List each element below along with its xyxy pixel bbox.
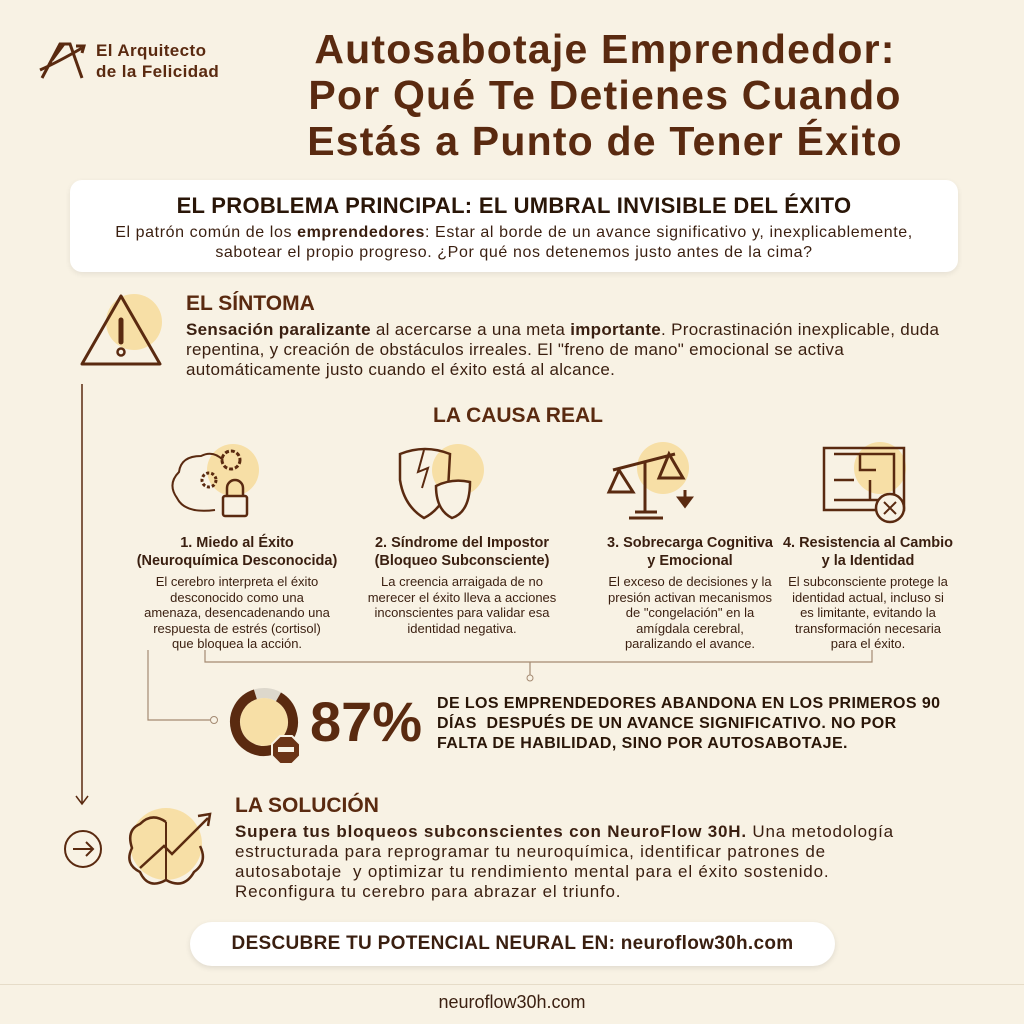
CTA pill — [190, 922, 835, 966]
title — [307, 26, 903, 164]
icon: shield mask — [398, 444, 484, 520]
text: problema: sabotear el propio progreso. ¿Por qué nos detenemos justo antes de la cima? — [215, 244, 813, 261]
icon: blueprint x — [822, 442, 906, 524]
footer url: neuroflow30h.com — [438, 992, 586, 1012]
logo: de la Felicidad — [96, 62, 219, 81]
CTA pill: DESCUBRE TU POTENCIAL NEURAL EN: neuroflow30h.com — [232, 933, 793, 954]
cause 2: (Bloqueo Subconsciente) — [375, 553, 549, 569]
cause 2 — [368, 535, 556, 636]
cause 3: paralizando el avance. — [625, 636, 755, 651]
logo: El Arquitecto — [96, 41, 206, 60]
stat number: 87% — [310, 690, 422, 753]
title: Por Qué Te Detienes Cuando — [308, 72, 902, 118]
cause 3: amígdala cerebral, — [636, 620, 744, 636]
cause 1: amenaza, desencadenando una — [144, 605, 330, 620]
icon: scale — [606, 442, 694, 520]
arrow: left flow — [76, 384, 88, 806]
connector lines — [147, 650, 873, 724]
icon: brain growth — [128, 808, 212, 885]
cause 2: merecer el éxito lleva a acciones — [368, 590, 556, 604]
section: síntoma: Sensación paralizante al acercarse a una meta importante. Procrastinación inexplicable, duda — [186, 320, 939, 339]
stat: donut 87% — [230, 688, 299, 763]
cause 3: de "congelación" en la — [626, 605, 754, 620]
cause 2: inconscientes para validar esa — [375, 605, 549, 620]
cause 3 — [607, 535, 774, 651]
cause 4: identidad actual, incluso si — [792, 590, 944, 604]
title: Autosabotaje Emprendedor: — [314, 26, 896, 72]
cause 1: que bloquea la acción. — [172, 636, 302, 651]
cause 4: El subconsciente protege la — [788, 574, 948, 589]
cause 3: presión activan mecanismos — [608, 590, 772, 604]
section: síntoma: repentina, y creación de obstáculos irreales. El "freno de mano" emocional se activa — [186, 340, 844, 359]
heading: causa real: LA CAUSA REAL — [433, 404, 603, 427]
stat text: DE LOS EMPRENDEDORES ABANDONA EN LOS PRIMEROS 90 — [437, 695, 940, 712]
stat text — [437, 695, 940, 752]
text: problema — [115, 224, 913, 261]
cause 2: identidad negativa. — [407, 620, 517, 636]
cause 4: 4. Resistencia al Cambio — [783, 535, 953, 551]
cause 4: para el éxito. — [831, 636, 905, 651]
cause 4: y la Identidad — [822, 553, 914, 569]
section: síntoma — [186, 291, 939, 379]
cause 4 — [783, 535, 953, 651]
stat text: FALTA DE HABILIDAD, SINO POR AUTOSABOTAJE. — [437, 735, 848, 752]
cause 4: transformación necesaria — [795, 620, 941, 636]
cause 1: respuesta de estrés (cortisol) — [153, 620, 321, 636]
section: solución: Supera tus bloqueos subconscientes con NeuroFlow 30H. Una metodología — [235, 822, 894, 841]
cause 2: 2. Síndrome del Impostor — [375, 535, 549, 551]
cause 1: El cerebro interpreta el éxito — [156, 574, 318, 589]
cause 4: es limitante, evitando la — [800, 605, 936, 620]
cause 1 — [137, 534, 337, 651]
heading: problema: EL PROBLEMA PRINCIPAL: EL UMBRAL INVISIBLE DEL ÉXITO — [177, 193, 851, 218]
cause 1: desconocido como una — [170, 590, 304, 604]
logo — [39, 41, 219, 81]
section: síntoma: EL SÍNTOMA — [186, 292, 315, 315]
icon: warning — [80, 294, 162, 366]
cause 3: El exceso de decisiones y la — [608, 574, 772, 589]
section: solución — [235, 792, 894, 901]
stat text: DÍAS DESPUÉS DE UN AVANCE SIGNIFICATIVO. NO POR — [437, 715, 897, 732]
icon: arrow circle — [64, 830, 102, 868]
section: solución: autosabotaje y optimizar tu rendimiento mental para el éxito sostenido. — [235, 862, 829, 881]
section: solución: estructurada para reprogramar tu neuroquímica, identificar patrones de — [235, 842, 826, 861]
section: síntoma: automáticamente justo cuando el éxito está al alcance. — [186, 360, 615, 379]
cause 3: 3. Sobrecarga Cognitiva — [607, 535, 773, 551]
title: Estás a Punto de Tener Éxito — [307, 118, 903, 164]
cause 1: (Neuroquímica Desconocida) — [137, 553, 337, 569]
cause 2: La creencia arraigada de no — [381, 574, 543, 589]
section: solución: Reconfigura tu cerebro para abrazar el triunfo. — [235, 882, 621, 901]
cause 3: y Emocional — [647, 553, 733, 569]
icon: brain gears — [171, 444, 259, 518]
text: problema: El patrón común de los emprendedores: Estar al borde de un avance significativo y, inexplicablemente, — [115, 224, 913, 241]
panel: problema principal — [70, 180, 958, 272]
section: solución: LA SOLUCIÓN — [235, 794, 379, 817]
cause 1: 1. Miedo al Éxito — [180, 535, 294, 551]
